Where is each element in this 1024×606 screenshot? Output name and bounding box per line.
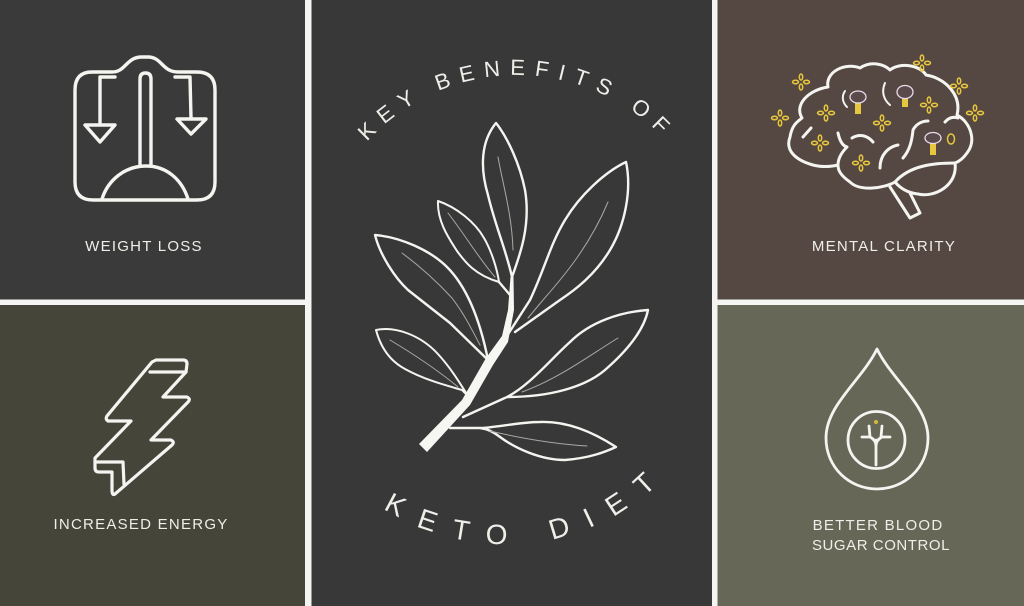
label: better blood sugar control: BETTER BLOOD [813, 517, 943, 534]
icon: brain with sparkles [772, 55, 984, 218]
panel: mental clarity [718, 0, 1024, 300]
label: weight loss: WEIGHT LOSS [85, 238, 203, 255]
label: better blood sugar control [812, 517, 950, 554]
icon: leaf sprig [375, 123, 648, 460]
icon: blood drop with tree [826, 349, 928, 489]
panel: weight loss [0, 0, 305, 300]
label: mental clarity: MENTAL CLARITY [812, 238, 956, 255]
panel: better blood sugar control [718, 305, 1024, 606]
panel: increased energy [0, 305, 305, 606]
label: better blood sugar control: SUGAR CONTROL [812, 537, 950, 554]
icon: weight scale with down arrows [75, 57, 215, 200]
panel: center title [312, 0, 712, 606]
icon: bulbs [850, 86, 941, 155]
heading: keto diet: KETO DIET [384, 471, 652, 544]
icon: lightning bolt [95, 360, 189, 494]
label: increased energy: INCREASED ENERGY [53, 516, 229, 533]
heading: key benefits of: KEY BENEFITS OF [358, 60, 670, 140]
